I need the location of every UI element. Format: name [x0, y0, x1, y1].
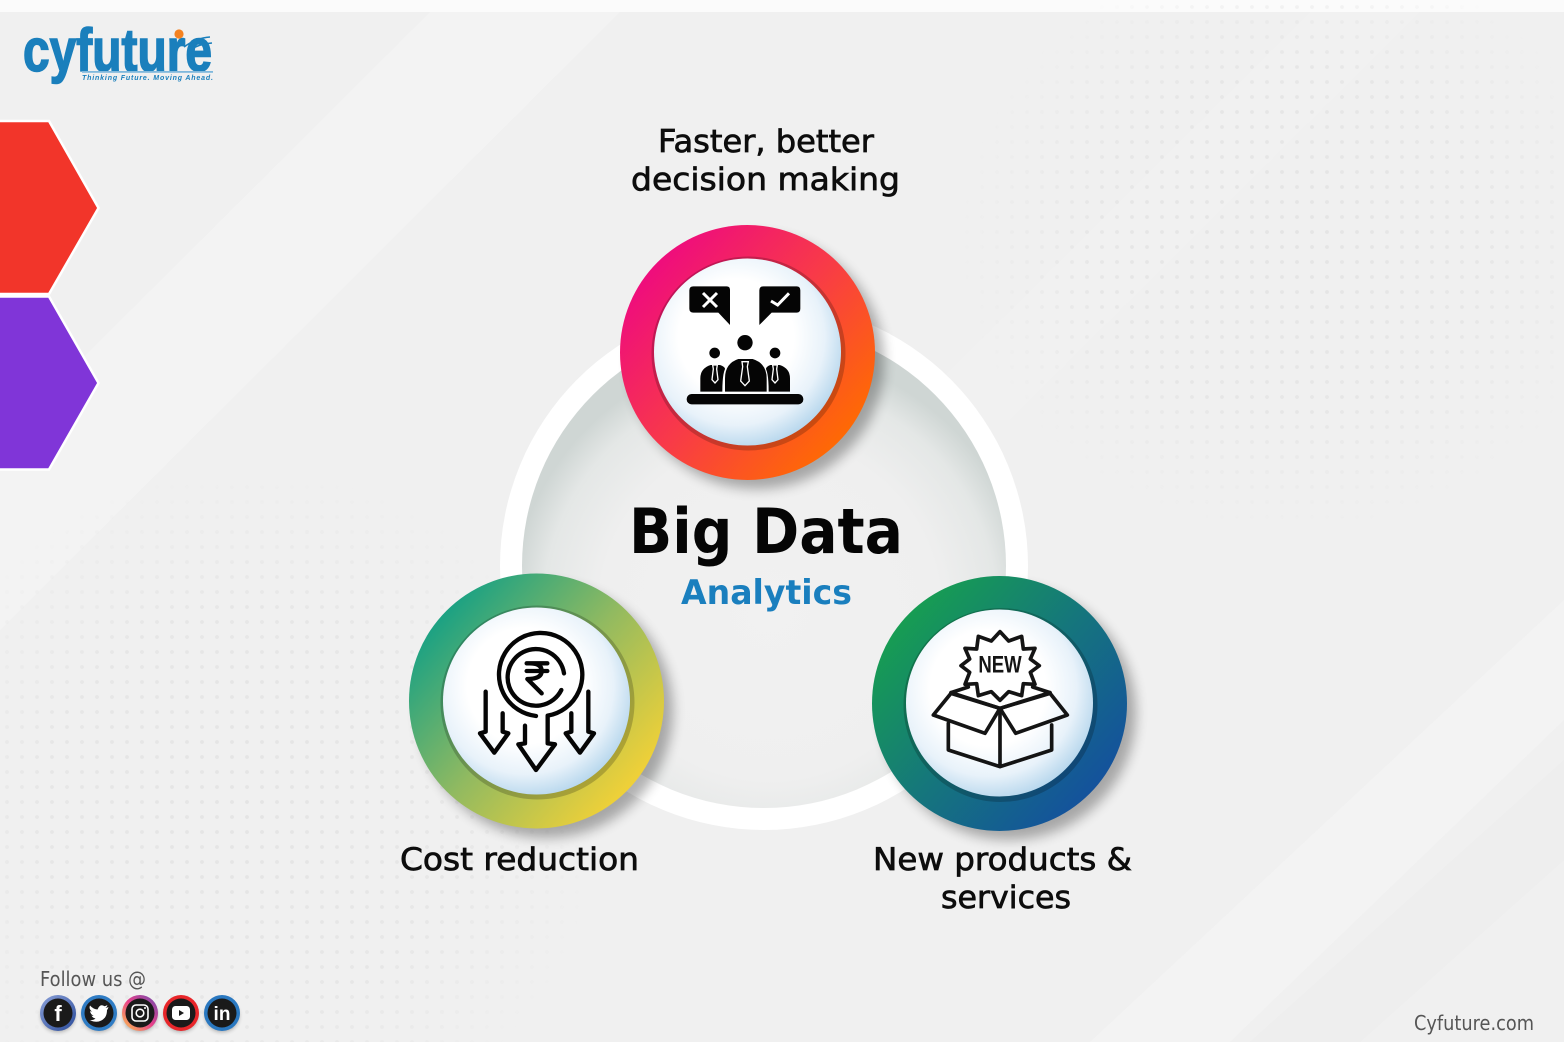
icon: twitter — [81, 995, 117, 1032]
icon: rupee cost down — [480, 633, 594, 770]
icon: youtube — [163, 995, 199, 1032]
top label: decision making — [631, 162, 900, 198]
label: new products and services: New products & — [873, 842, 1132, 878]
hexagon: red — [0, 121, 98, 294]
top label: Faster, better — [658, 124, 874, 160]
label: new products and services — [873, 842, 1132, 916]
panel: new products circle — [872, 576, 1136, 840]
icon: new box: NEW — [978, 652, 1022, 678]
logo: cyfuture: Thinking Future. Moving Ahead. — [82, 75, 213, 82]
hexagon: purple — [0, 296, 98, 470]
icon: facebook: f — [54, 1001, 62, 1026]
icon: linkedin: in — [214, 1004, 230, 1025]
website: Cyfuture.com — [1414, 1011, 1534, 1035]
icon: new box — [933, 632, 1067, 767]
title: Big Data: Big Data — [629, 495, 903, 568]
panel: faster decision making circle — [620, 225, 884, 489]
central ring — [500, 302, 1028, 830]
logo: cyfuture: cyfuture — [23, 17, 212, 84]
follow us text: Follow us @ — [40, 967, 146, 991]
icon: linkedin — [204, 995, 240, 1032]
social icons — [40, 995, 240, 1032]
icon: decision team — [687, 286, 803, 404]
label: cost reduction: Cost reduction — [400, 842, 639, 878]
subtitle: Analytics: Analytics — [681, 573, 852, 613]
icon: instagram — [122, 995, 158, 1032]
icon: facebook — [40, 995, 76, 1032]
label: new products and services: services — [941, 880, 1071, 916]
panel: cost reduction circle — [409, 574, 673, 838]
top label — [631, 124, 900, 198]
